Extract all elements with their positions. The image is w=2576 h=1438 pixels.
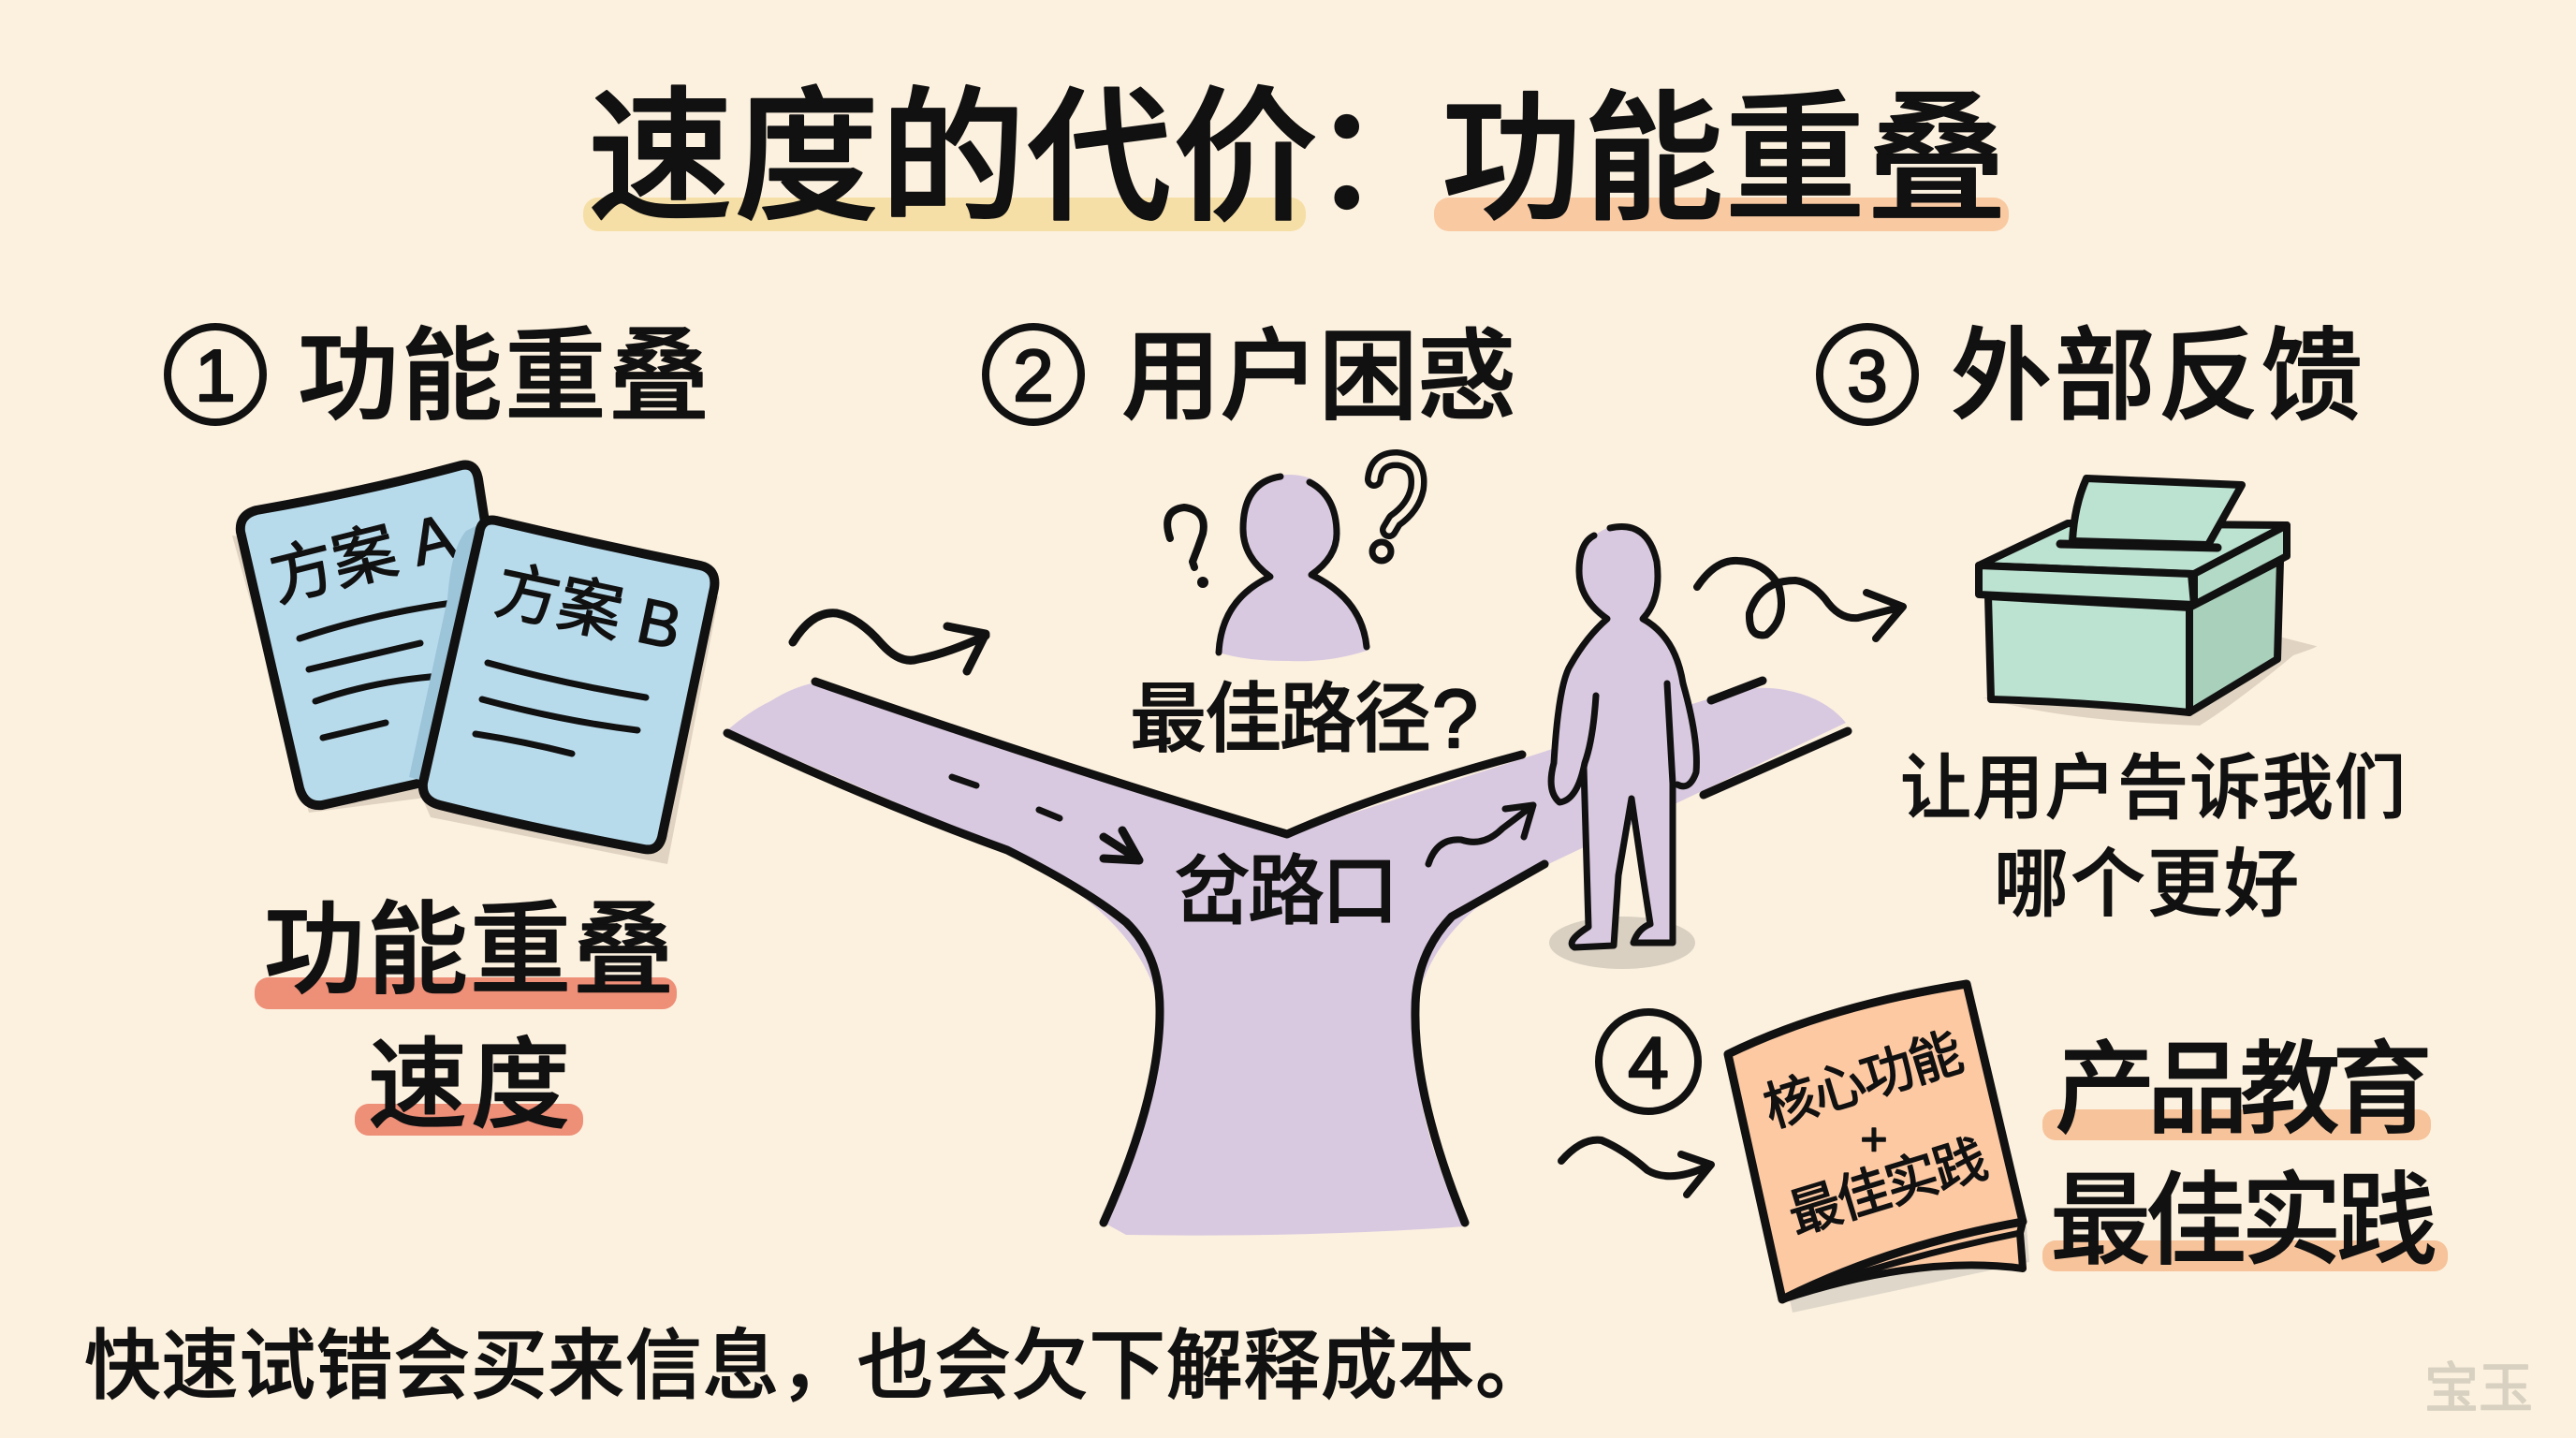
title: 速度的代价 bbox=[588, 77, 1318, 239]
document B bbox=[421, 521, 719, 864]
label: crossroads: 岔路口 bbox=[1174, 849, 1398, 934]
number 4: 4 bbox=[1628, 1021, 1669, 1104]
icon: guide book: 核心功能 bbox=[1757, 1021, 1969, 1137]
lid bbox=[1979, 523, 2287, 574]
document B: 方案 B bbox=[490, 554, 688, 663]
icon: standing person bbox=[1549, 524, 1696, 969]
box shadow bbox=[1983, 637, 2317, 726]
arrow: to guide book bbox=[1561, 1140, 1711, 1195]
text: product education: 产品教育 bbox=[2055, 1033, 2433, 1146]
icon: ballot box bbox=[1979, 478, 2317, 726]
heading: step 2: 2 bbox=[1013, 334, 1054, 417]
watermark: 宝玉 bbox=[2424, 1358, 2533, 1419]
heading: step 3: 3 bbox=[1847, 334, 1888, 417]
text: let users tell us bbox=[1900, 749, 2406, 926]
text: let users tell us: 哪个更好 bbox=[1994, 843, 2299, 926]
text: let users tell us: 让用户告诉我们 bbox=[1900, 749, 2406, 829]
document A: 方案 A bbox=[263, 500, 463, 615]
box body bbox=[1988, 596, 2189, 712]
road edges bbox=[727, 681, 1848, 1223]
text: best practice: 最佳实践 bbox=[2050, 1164, 2437, 1277]
document A cast shadow bbox=[409, 524, 479, 782]
number 4 bbox=[1599, 1012, 1698, 1111]
document A bbox=[232, 465, 487, 813]
heading: step 1: 1 bbox=[195, 334, 236, 417]
icon: guide book: 最佳实践 bbox=[1781, 1128, 1994, 1244]
ballot paper bbox=[2072, 478, 2242, 545]
forked road bbox=[727, 681, 1848, 1236]
heading: step 2: 用户困惑 bbox=[1121, 322, 1516, 433]
icon: guide book bbox=[1728, 984, 2029, 1313]
road arrow left bbox=[1104, 830, 1139, 860]
text: speed: 速度 bbox=[368, 1031, 570, 1141]
arrow: documents to road bbox=[793, 613, 986, 671]
title: 功能重叠 bbox=[1442, 81, 2007, 238]
icon: confused person bust bbox=[1219, 475, 1367, 661]
bottom takeaway: 快速试错会买来信息，也会欠下解释成本。 bbox=[84, 1324, 1552, 1409]
heading: step 3: 外部反馈 bbox=[1951, 319, 2363, 433]
road arrow right bbox=[1428, 805, 1533, 864]
icon: overlapping documents bbox=[232, 465, 719, 864]
label: best path: 最佳路径 bbox=[1130, 677, 1431, 762]
icon: question marks bbox=[1167, 459, 1418, 588]
title: ： bbox=[1310, 77, 1456, 239]
label: best path: ? bbox=[1432, 672, 1478, 765]
person shadow bbox=[1549, 917, 1695, 969]
text: feature overlap: 功能重叠 bbox=[264, 893, 674, 1006]
title bbox=[583, 77, 2009, 239]
icon: guide book: + bbox=[1860, 1113, 1888, 1166]
road dashes bbox=[952, 777, 1060, 818]
arrow: person to ballot box bbox=[1697, 561, 1903, 638]
heading: step 1: 功能重叠 bbox=[298, 319, 710, 433]
